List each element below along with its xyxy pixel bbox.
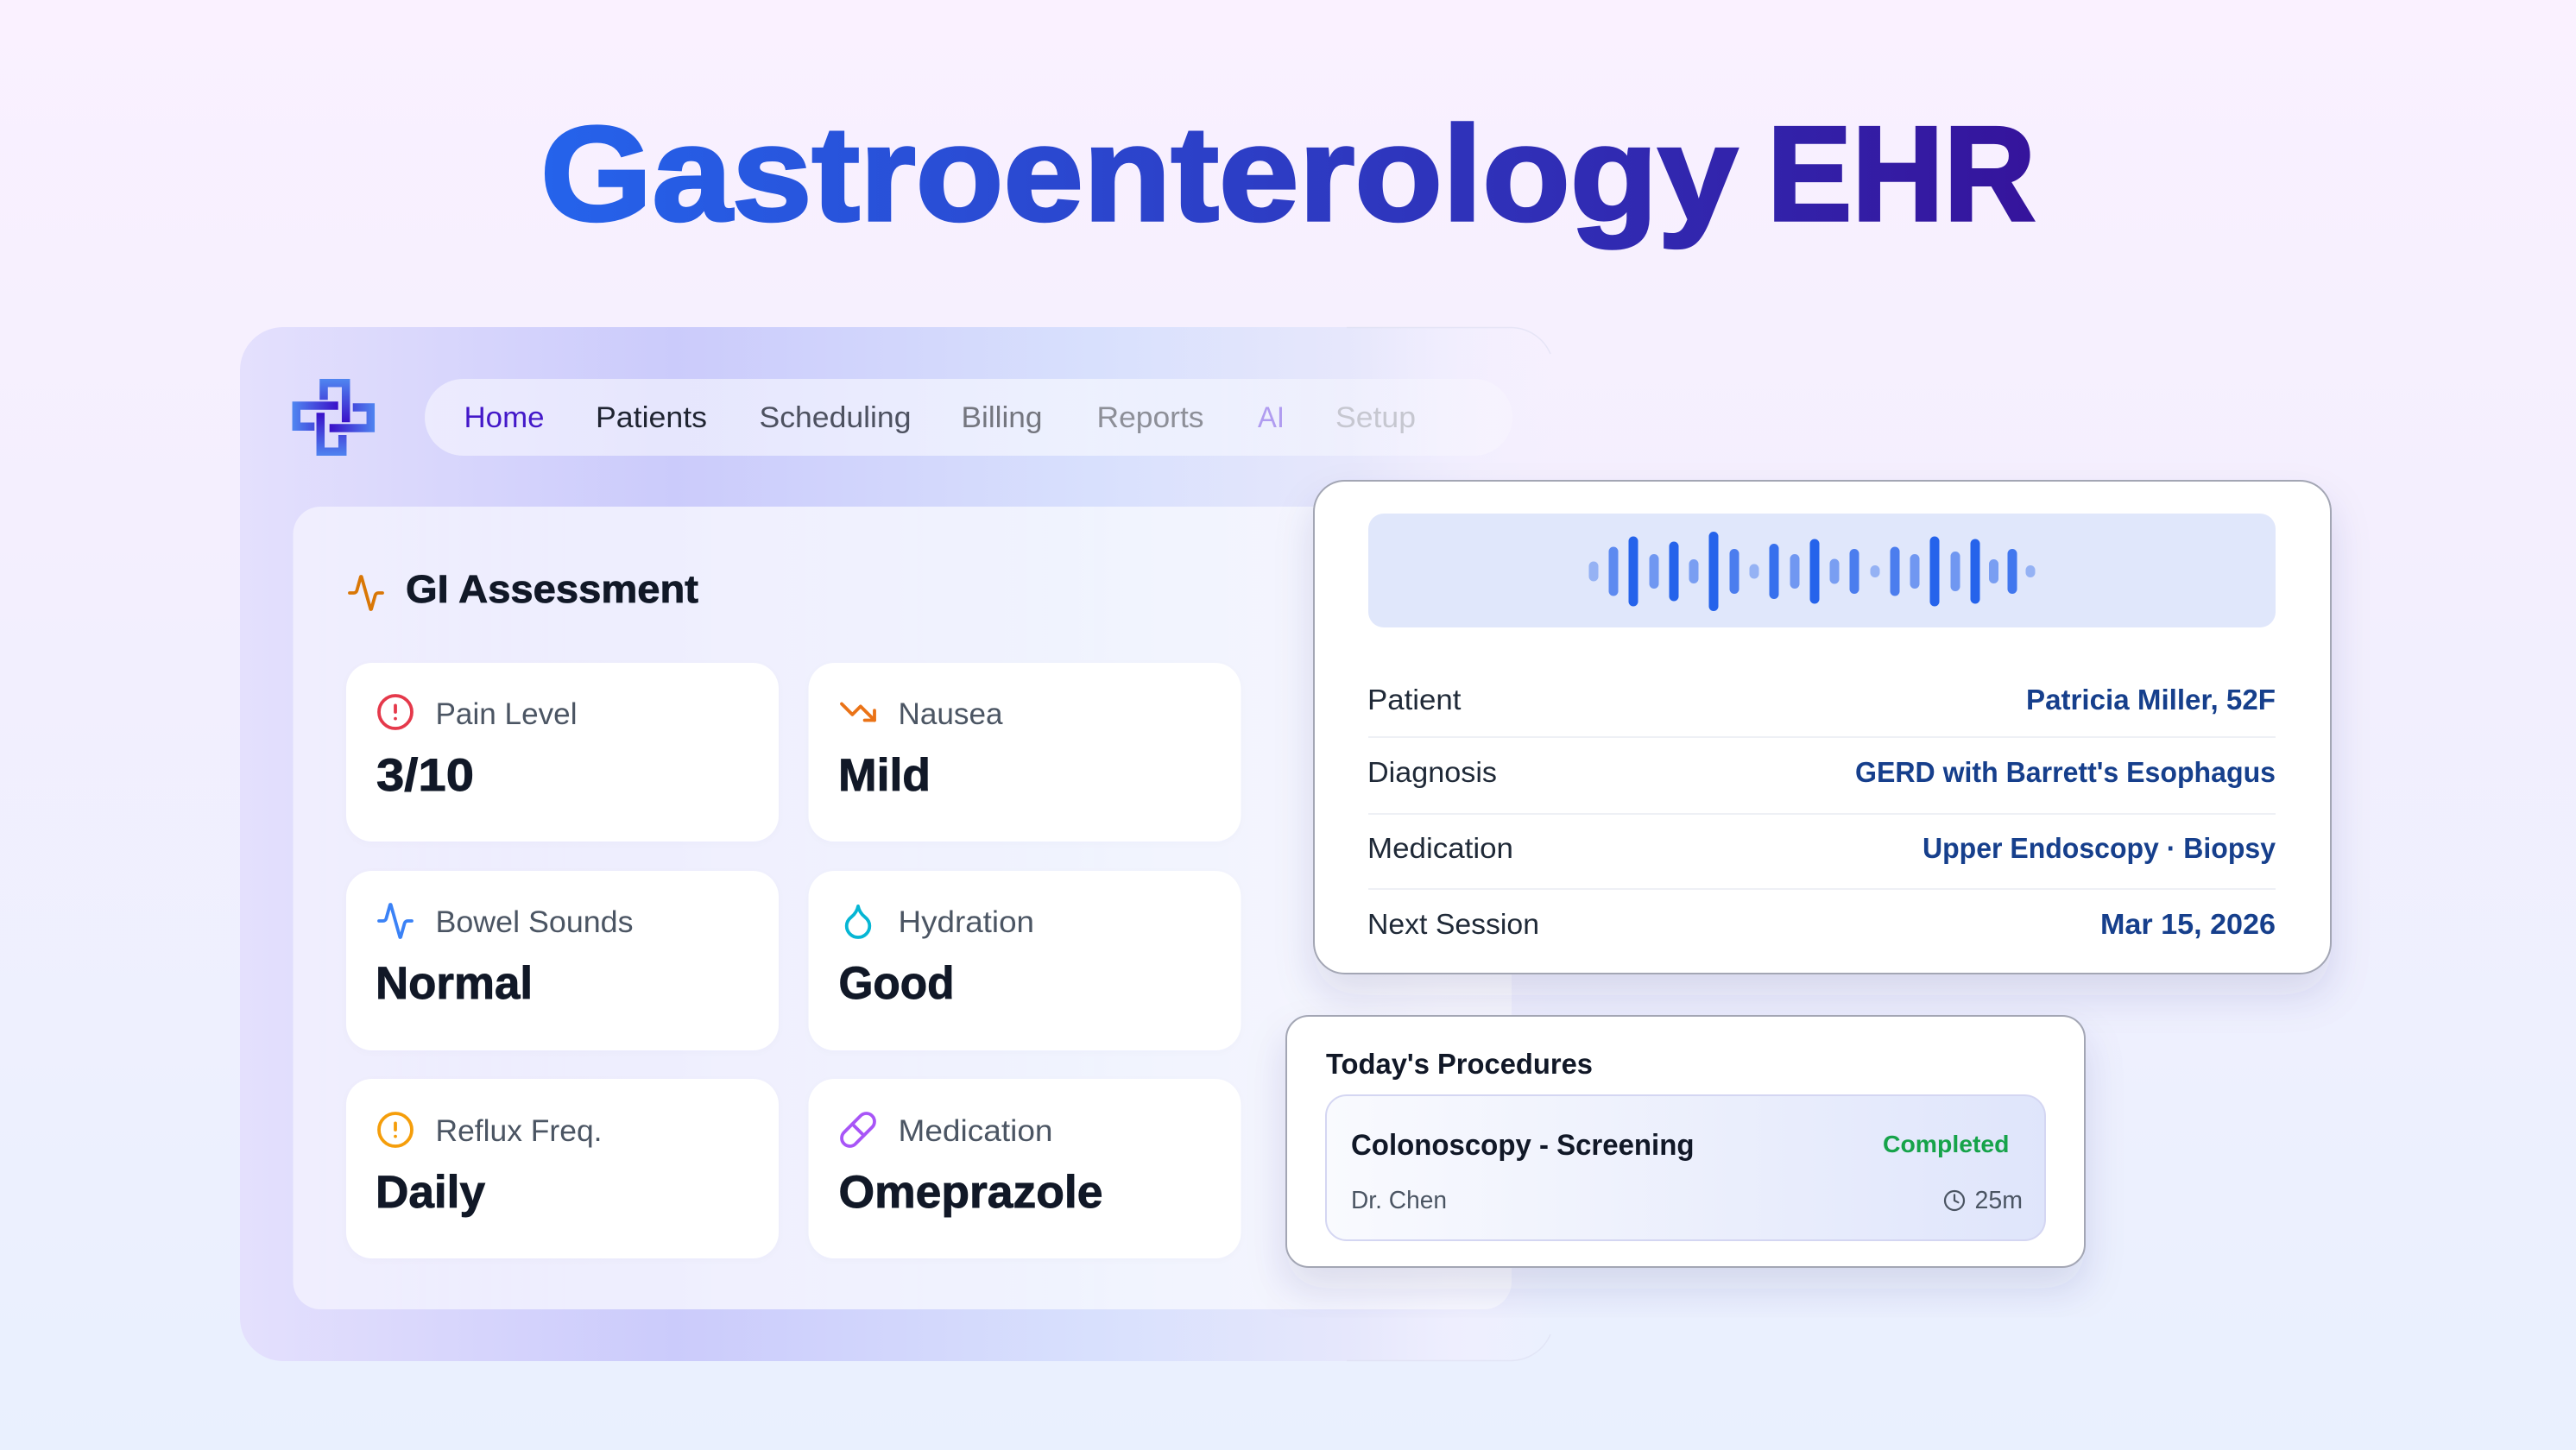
card: Pain Level bbox=[346, 663, 779, 842]
title: EHR bbox=[1767, 99, 2036, 249]
card: Bowel Sounds bbox=[346, 871, 779, 1050]
icon: alert circle red bbox=[379, 696, 412, 728]
row: Diagnosis: Diagnosis bbox=[1367, 756, 1497, 788]
duration: 25m bbox=[1975, 1187, 2023, 1214]
row: Medication bbox=[1367, 832, 2276, 864]
value: Daily: Daily bbox=[376, 1167, 486, 1218]
card: Reflux Freq. bbox=[346, 1079, 779, 1258]
audio waveform bbox=[1368, 514, 2276, 627]
icon: interlocking cross logo bbox=[296, 383, 370, 451]
label: Pain Level: Pain Level bbox=[435, 697, 577, 731]
doctor name: Dr. Chen bbox=[1351, 1187, 1447, 1214]
icon: trending down orange bbox=[842, 704, 874, 720]
nav item: Setup: Setup bbox=[1335, 401, 1416, 434]
row: Next Session: Mar 15, 2026 bbox=[2100, 908, 2276, 940]
card: Hydration bbox=[808, 871, 1241, 1050]
icon: clock bbox=[1945, 1191, 1964, 1210]
card: Nausea bbox=[808, 663, 1241, 842]
nav bar pill bbox=[425, 379, 1512, 456]
nav item: Reports: Reports bbox=[1096, 401, 1203, 434]
icon: orange activity pulse bbox=[350, 577, 382, 609]
row: Patient: Patient bbox=[1367, 684, 1461, 716]
card: Medication bbox=[808, 1079, 1241, 1258]
icon: pill purple bbox=[842, 1113, 874, 1146]
nav item: Scheduling: Scheduling bbox=[760, 401, 912, 434]
row: Diagnosis: GERD with Barrett's Esophagus bbox=[1855, 756, 2276, 788]
panel: patient summary card bbox=[1314, 481, 2331, 974]
row: Diagnosis bbox=[1367, 756, 2276, 788]
panel: main app window bbox=[240, 327, 1554, 1361]
row: Next Session bbox=[1367, 908, 2276, 940]
label: Bowel Sounds: Bowel Sounds bbox=[435, 905, 634, 939]
status: Completed: Completed bbox=[1883, 1131, 2010, 1157]
value: Normal: Normal bbox=[376, 958, 533, 1009]
row: Next Session: Next Session bbox=[1367, 908, 1539, 940]
app window background bbox=[240, 327, 1554, 1361]
row: Patient bbox=[1367, 684, 2276, 716]
procedures card background bbox=[1286, 1016, 2085, 1267]
nav item: Billing: Billing bbox=[962, 401, 1043, 434]
procedure item bbox=[1326, 1095, 2045, 1240]
nav item: Home: Home bbox=[464, 401, 544, 434]
value: 3/10: 3/10 bbox=[376, 750, 474, 801]
waveform background bbox=[1368, 514, 2276, 627]
label: Reflux Freq.: Reflux Freq. bbox=[435, 1114, 603, 1148]
label: Medication: Medication bbox=[898, 1114, 1053, 1148]
row: Medication: Medication bbox=[1367, 832, 1513, 864]
nav item: Patients: Patients bbox=[596, 401, 707, 434]
nav item: AI: AI bbox=[1258, 401, 1285, 434]
icon: droplet cyan bbox=[847, 906, 869, 937]
value: Good: Good bbox=[839, 958, 955, 1009]
value: Omeprazole: Omeprazole bbox=[839, 1167, 1103, 1218]
label: Nausea: Nausea bbox=[898, 697, 1003, 731]
panel: today's procedures bbox=[1286, 1016, 2085, 1267]
procedure name: Colonoscopy - Screening bbox=[1351, 1129, 1694, 1162]
summary card background bbox=[1314, 481, 2331, 974]
waveform bars bbox=[1588, 532, 2036, 611]
heading: GI Assessment: GI Assessment bbox=[406, 567, 698, 611]
label: Hydration: Hydration bbox=[898, 905, 1034, 939]
value: Mild: Mild bbox=[838, 750, 931, 801]
icon: alert circle amber bbox=[379, 1113, 412, 1146]
panel: GI assessment bbox=[294, 507, 1512, 1309]
heading: Today's Procedures: Today's Procedures bbox=[1326, 1048, 1593, 1080]
row: Medication: Upper Endoscopy · Biopsy bbox=[1923, 832, 2276, 864]
procedure item background bbox=[1326, 1095, 2045, 1240]
title: Gastroenterology bbox=[540, 99, 1738, 249]
GI assessment background bbox=[294, 507, 1512, 1309]
navigation bar bbox=[425, 379, 1512, 456]
row: Patient: Patricia Miller, 52F bbox=[2026, 684, 2276, 716]
icon: activity blue bbox=[379, 905, 412, 937]
